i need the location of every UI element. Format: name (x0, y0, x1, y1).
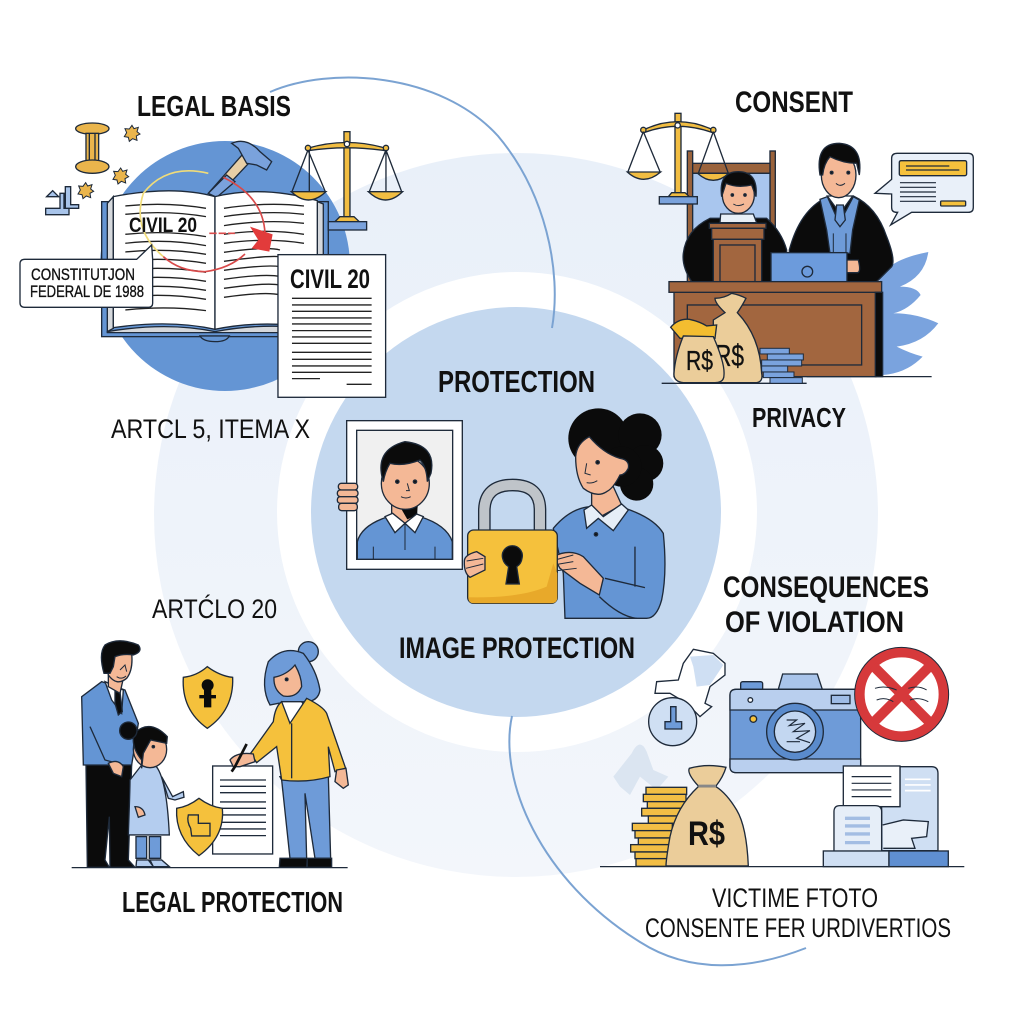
blue stack (760, 348, 803, 383)
heading: consequences: CONSEQUENCES (723, 571, 929, 604)
callout text: CONSTITUTJON (31, 265, 135, 284)
book (102, 191, 328, 342)
shield: keyhole (183, 667, 233, 728)
padlock (464, 485, 557, 603)
panel: legal basis (20, 91, 403, 444)
document machine (823, 766, 948, 867)
icon: sparks (78, 125, 140, 199)
scales (627, 113, 729, 204)
bag label: R$ (688, 815, 725, 853)
scales (291, 132, 403, 230)
portrait frame (347, 421, 462, 569)
panel: consent (627, 86, 973, 433)
laptop (771, 253, 847, 282)
caption: victim text (645, 883, 951, 943)
red and yellow arrows (140, 171, 273, 272)
money bag large (713, 293, 762, 383)
shield: badge (177, 798, 223, 856)
caption: victim text: VICTIME FTOTO (712, 883, 878, 913)
ground (662, 377, 932, 383)
desk (669, 282, 883, 377)
leaves (879, 252, 938, 375)
caption: privacy: PRIVACY (752, 402, 846, 433)
bag label large: R$ (715, 338, 744, 373)
arc: upper connector (270, 78, 555, 328)
callout text (30, 265, 144, 301)
icon: column (76, 123, 109, 173)
blue disc (100, 141, 350, 391)
illustration: book and law (20, 123, 403, 397)
heading: legal basis: LEGAL BASIS (137, 91, 291, 123)
money bag small with gold (671, 319, 724, 383)
ground (72, 866, 348, 870)
panel: consequences (600, 571, 964, 943)
label: civil 20 in book: CIVIL 20 (129, 214, 197, 237)
coins (631, 787, 687, 866)
callout: constitution (20, 245, 153, 307)
caption: article 5: ARTCL 5, ITEMA X (111, 414, 310, 444)
heading: consequences: OF VIOLATION (725, 606, 904, 639)
man (82, 641, 140, 867)
woman (553, 408, 665, 618)
prohibition sign (855, 647, 949, 741)
background rings (154, 153, 878, 877)
woman (230, 642, 348, 867)
central circle (311, 307, 721, 717)
camera (730, 674, 861, 773)
icon: small blue shape (46, 187, 79, 215)
heading: consequences (723, 571, 929, 639)
heading: consent: CONSENT (735, 86, 853, 119)
seated judge (683, 172, 787, 282)
caption: legal protection: LEGAL PROTECTION (122, 887, 343, 919)
speech bubble (875, 153, 973, 225)
money bag (666, 766, 748, 866)
callout text: FEDERAL DE 1988 (30, 282, 144, 301)
faint robot (613, 745, 668, 795)
arc: lower connector (509, 716, 806, 965)
illustration: consequences (600, 647, 964, 867)
illustration: portrait and lock (337, 408, 665, 618)
heading: protection: PROTECTION (438, 364, 595, 399)
icon: hammer (208, 141, 272, 197)
standing lawyer (789, 143, 893, 282)
icon: map and stamp (649, 649, 725, 746)
panel: protection (337, 364, 665, 665)
heading: article 20: ARTĆLO 20 (152, 593, 277, 624)
label: civil 20 on document: CIVIL 20 (290, 264, 370, 294)
caption: image protection: IMAGE PROTECTION (399, 632, 635, 665)
lectern (709, 223, 766, 282)
ground (600, 865, 964, 869)
hand on frame (337, 483, 358, 511)
chair (687, 151, 775, 283)
child (120, 722, 184, 867)
document (278, 255, 386, 397)
illustration: court (627, 113, 973, 383)
illustration: family (72, 641, 348, 868)
document (213, 766, 273, 854)
bag label small: R$ (686, 345, 713, 376)
panel: legal protection (72, 593, 348, 919)
